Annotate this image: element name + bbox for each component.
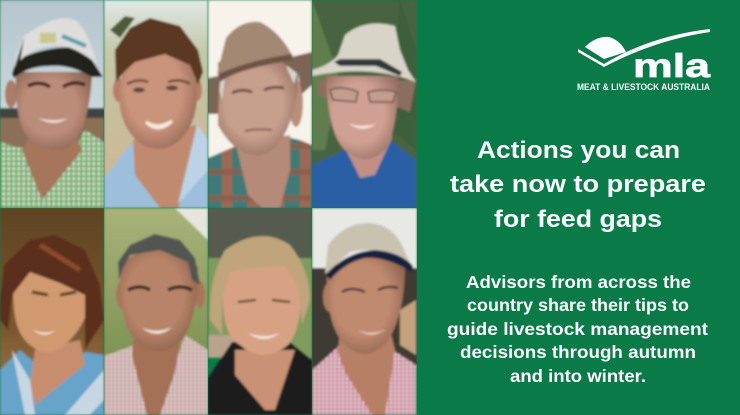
logo wordmark: mla: mla bbox=[633, 47, 711, 84]
photo: young man with brown hair and blue shirt bbox=[104, 0, 208, 208]
heading: for feed gaps bbox=[494, 206, 662, 233]
photo: man with grey hair and pink check shirt bbox=[104, 208, 208, 415]
body text: and into winter. bbox=[510, 366, 646, 386]
photo: older man with brown felt hat and plaid shirt bbox=[208, 0, 312, 208]
logo mark: dome and swoosh bbox=[578, 29, 710, 67]
body text: country share their tips to bbox=[467, 295, 689, 315]
photo: woman with auburn hair and blue shirt bbox=[0, 208, 104, 415]
photo: man in white cap and green check shirt bbox=[0, 0, 104, 208]
body text: decisions through autumn bbox=[460, 342, 696, 362]
photo: man in cream hat, glasses and blue shirt bbox=[312, 0, 417, 208]
heading: take now to prepare bbox=[450, 171, 706, 198]
heading: Actions you can bbox=[477, 137, 680, 164]
photo: woman with blonde hair and black jacket bbox=[208, 208, 312, 415]
logo caption: MEAT & LIVESTOCK AUSTRALIA bbox=[577, 82, 710, 92]
logo: Meat & Livestock Australia bbox=[577, 29, 711, 92]
body text: guide livestock management bbox=[447, 319, 708, 339]
body text: Advisors from across the bbox=[466, 272, 691, 292]
heading bbox=[450, 137, 706, 233]
photo: man in cream cap and red check shirt bbox=[312, 208, 417, 415]
body text bbox=[447, 272, 708, 386]
